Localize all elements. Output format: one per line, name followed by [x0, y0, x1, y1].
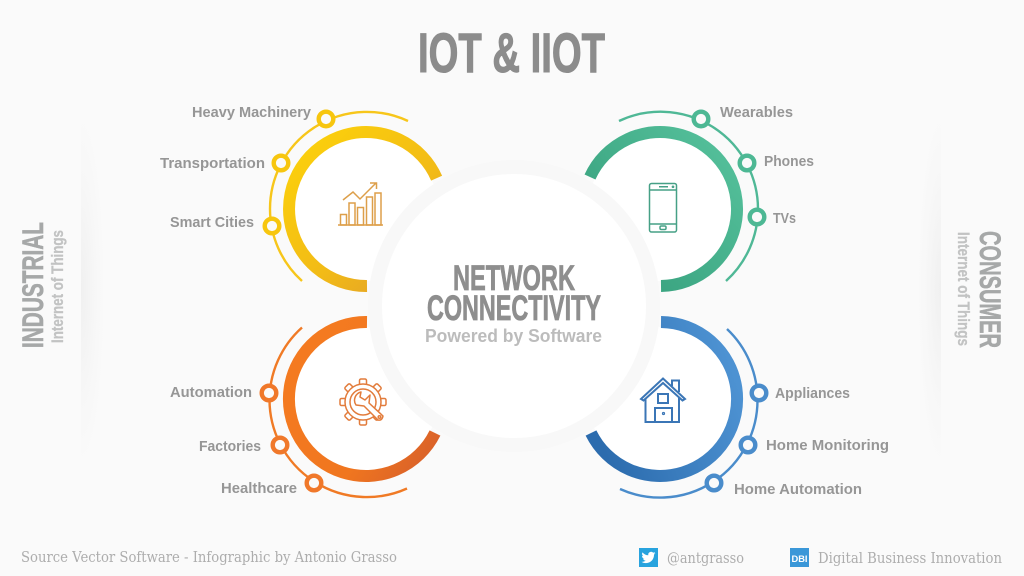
icon: house	[641, 378, 685, 422]
node: heavy machinery	[319, 112, 333, 126]
label: transportation: Transportation	[160, 155, 265, 172]
node: factories	[273, 438, 287, 452]
icon: dbi logo: DBI	[792, 554, 808, 564]
subheading: internet of things right: Internet of Things	[954, 232, 973, 346]
node: phones	[740, 156, 754, 170]
panel: consumer side label	[954, 231, 1006, 348]
thin yellow arc	[270, 112, 408, 281]
node: transportation	[274, 156, 288, 170]
icon: bar chart with arrow	[338, 183, 383, 225]
label: home monitoring: Home Monitoring	[766, 437, 889, 454]
panel: bottom-right blue ring	[588, 322, 766, 498]
node: home automation	[707, 476, 721, 490]
thin orange arc	[270, 328, 407, 497]
footer source text: Source Vector Software - Infographic by Antonio Grasso	[21, 550, 397, 566]
label: healthcare: Healthcare	[221, 480, 297, 497]
icon: dbi logo	[790, 548, 809, 567]
thick green arc	[590, 132, 737, 286]
footer twitter handle: @antgrasso	[667, 551, 744, 567]
panel: bottom-left orange ring	[262, 322, 438, 497]
thin blue arc	[620, 329, 758, 498]
icon: twitter	[639, 548, 658, 567]
heading: connectivity: CONNECTIVITY	[427, 289, 601, 328]
label: appliances: Appliances	[775, 385, 850, 402]
icon: smartphone	[650, 184, 676, 232]
label: home automation: Home Automation	[734, 481, 862, 498]
node: appliances	[752, 386, 766, 400]
label: phones: Phones	[764, 153, 814, 170]
heading: industrial: INDUSTRIAL	[17, 222, 50, 348]
left side shadow	[81, 261, 84, 320]
icon: gear and wrench	[340, 379, 386, 425]
label: tvs: TVs	[773, 210, 796, 227]
heading: network: NETWORK	[453, 259, 575, 298]
label: heavy machinery: Heavy Machinery	[192, 104, 312, 121]
heading: consumer: CONSUMER	[973, 231, 1006, 348]
node: tvs	[750, 210, 764, 224]
right side shadow	[937, 261, 941, 318]
panel: top-right green ring	[588, 112, 764, 286]
thick yellow arc	[289, 132, 437, 286]
panel: industrial side label	[17, 222, 67, 348]
panel: central circle	[368, 160, 660, 452]
node: wearables	[694, 112, 708, 126]
panel: top-left yellow ring	[265, 112, 438, 286]
node: automation	[262, 386, 276, 400]
node: home monitoring	[741, 438, 755, 452]
label: wearables: Wearables	[720, 104, 793, 121]
label: factories: Factories	[199, 438, 261, 455]
node: healthcare	[307, 476, 321, 490]
label: automation: Automation	[170, 384, 252, 401]
thick orange arc	[289, 322, 435, 476]
thick blue arc	[591, 322, 737, 476]
label: smart cities: Smart Cities	[170, 214, 254, 231]
subheading: powered by software: Powered by Software	[425, 326, 602, 346]
thin green arc	[619, 112, 758, 281]
node: smart cities	[265, 219, 279, 233]
title: IOT & IIOT	[418, 21, 605, 84]
footer brand name: Digital Business Innovation	[818, 551, 1002, 567]
subheading: internet of things left: Internet of Things	[48, 230, 67, 343]
